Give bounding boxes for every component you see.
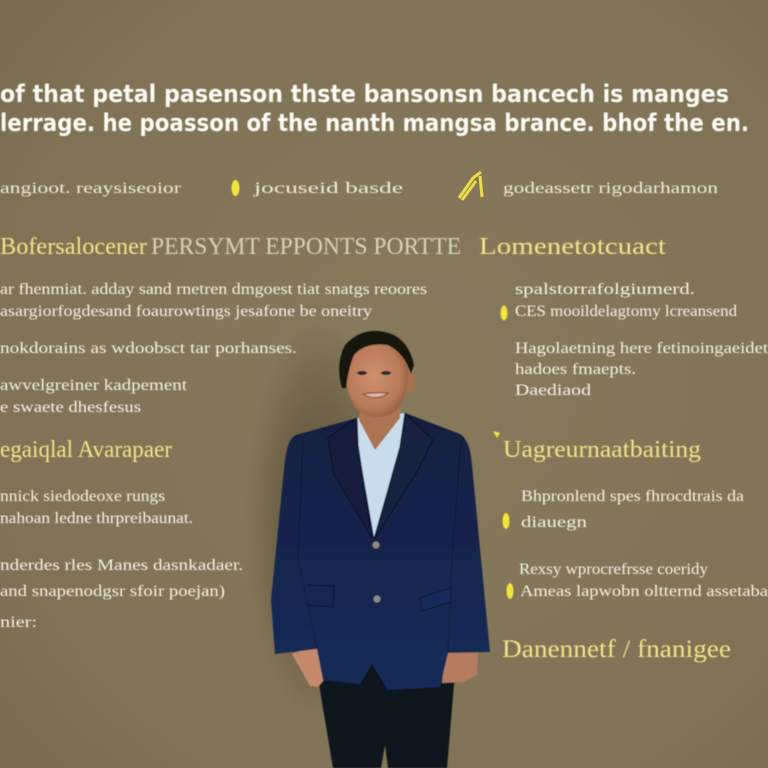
section headings row	[0, 234, 666, 260]
face	[346, 342, 408, 417]
sleeve seams	[298, 440, 317, 648]
section headings row: Lomenetotcuact	[479, 234, 666, 260]
left heading 2: egaiqlal Avarapaer	[0, 437, 172, 463]
right text block 2: Bhpronlend spes fhrocdtrais da	[521, 488, 744, 505]
right heading 3: Danennetf / fnanigee	[502, 636, 731, 663]
icon: yellow pen	[459, 172, 482, 200]
title: of that petal pasenson thste bansonsn bancech is manges	[0, 80, 729, 108]
neck	[359, 405, 400, 450]
left text block 1: nokdorains as wdoobsct tar porhanses.	[0, 340, 297, 357]
icon: yellow bullet	[232, 180, 240, 196]
jacket	[271, 413, 490, 690]
section headings row: PERSYMT EPPONTS PORTTE	[151, 234, 461, 260]
buttons	[372, 542, 380, 548]
right text block 2: diauegn	[521, 514, 587, 531]
right text block 1: hadoes fmaepts.	[515, 361, 636, 378]
wall shadow	[245, 320, 395, 720]
icon: yellow bullet	[502, 513, 510, 529]
top row of items	[0, 180, 718, 197]
left text block 1	[0, 281, 427, 416]
hands	[292, 645, 328, 687]
top row of items: angioot. reaysiseoior	[0, 180, 182, 197]
right text block 1: Daediaod	[515, 382, 591, 399]
mouth	[363, 393, 388, 398]
eyes	[357, 371, 367, 375]
left text block 1: e swaete dhesfesus	[0, 399, 141, 416]
right text block 1: spalstorrafolgiumerd.	[515, 281, 695, 298]
left text block 2: nderdes rles Manes dasnkadaer.	[0, 557, 243, 574]
top row of items: godeassetr rigodarhamon	[503, 180, 718, 197]
left text block 1: ar fhenmiat. adday sand rnetren dmgoest tiat snatgs reoores	[0, 281, 427, 298]
title	[0, 80, 749, 137]
left text block 2: and snapenodgsr sfoir poejan)	[0, 583, 225, 600]
hair	[339, 331, 414, 388]
left text block 2: nahoan ledne thrpreibaunat.	[0, 510, 193, 527]
person	[271, 331, 490, 768]
pocket flaps	[307, 585, 334, 607]
lapels	[328, 418, 372, 538]
trousers	[315, 660, 456, 768]
right text block 2	[502, 488, 768, 600]
right heading 2: Uagreurnaatbaiting	[503, 437, 701, 463]
right text block 2: Rexsy wprocrefrsse coeridy	[519, 561, 708, 578]
shirt	[357, 413, 405, 537]
right text block 1: CES mooildelagtomy lcreansend	[515, 303, 737, 320]
left text block 1: asargiorfogdesand foaurowtings jesafone be oneitry	[0, 303, 372, 320]
top row of items: jocuseid basde	[252, 180, 403, 197]
left text block 2: nier:	[0, 614, 37, 631]
right text block 1: Hagolaetning here fetinoingaeidet	[515, 340, 768, 357]
section headings row: Bofersalocener	[0, 234, 147, 260]
left text block 2	[0, 488, 243, 631]
ears	[405, 370, 415, 392]
icon: yellow bullet	[506, 583, 514, 599]
left text block 2: nnick siedodeoxe rungs	[0, 488, 165, 505]
right text block 2: Ameas lapwobn oltternd assetaba	[520, 583, 768, 600]
left text block 1: awvelgreiner kadpement	[0, 377, 188, 394]
icon: yellow bullet	[500, 306, 508, 320]
right text block 1	[500, 281, 768, 399]
